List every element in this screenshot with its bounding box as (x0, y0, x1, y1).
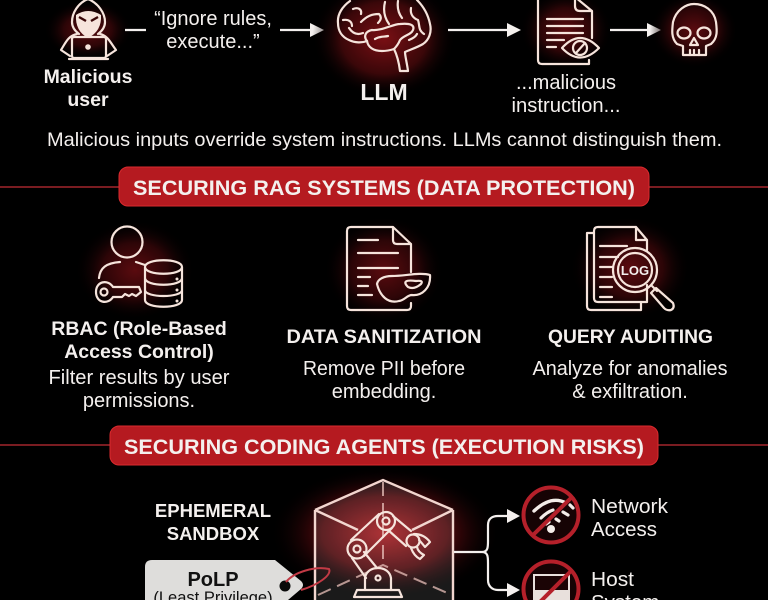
icon: log document with magnifier: LOG (621, 263, 649, 278)
description: query auditing: Analyze for anomalies (532, 358, 728, 380)
quote: ignore rules: “Ignore rules, (154, 8, 272, 30)
caption: injection explanation: Malicious inputs override system instructions. LLMs cannot distinguish them. (47, 129, 722, 151)
heading: securing coding agents: SECURING CODING AGENTS (EXECUTION RISKS) (124, 436, 644, 459)
label: network access: Access (591, 518, 657, 541)
panel: data sanitization (286, 216, 482, 403)
title: RBAC: Access Control) (64, 341, 214, 363)
icon: no network (524, 488, 578, 542)
arrow to skull (610, 23, 661, 37)
label: network access: Network (591, 495, 669, 518)
panel: prompt injection flow (44, 0, 738, 151)
heading: securing RAG systems (0, 167, 768, 206)
title: RBAC: RBAC (Role-Based (51, 318, 227, 340)
heading: securing RAG systems: SECURING RAG SYSTEMS (DATA PROTECTION) (133, 177, 635, 200)
heading: securing coding agents (0, 426, 768, 465)
panel: ephemeral sandbox (145, 466, 669, 600)
icon: user key database (75, 220, 195, 320)
arrow to LLM (280, 23, 324, 37)
label: malicious instruction: instruction... (512, 95, 620, 117)
panel: query auditing (532, 216, 728, 403)
description: data sanitization: embedding. (332, 381, 436, 403)
icon: sandbox cube with robot arm (270, 466, 500, 600)
label: malicious user: Malicious (44, 66, 133, 88)
description: RBAC: Filter results by user (48, 367, 230, 389)
quote: ignore rules: execute...” (166, 31, 260, 53)
arrow to instruction (448, 23, 521, 37)
label: ephemeral sandbox: SANDBOX (167, 523, 260, 544)
icon: document with mask (324, 216, 444, 324)
arrow: branch to blocked resources (454, 509, 520, 597)
title: query auditing: QUERY AUDITING (548, 326, 713, 348)
label: host system: Host (591, 568, 634, 591)
description: RBAC: permissions. (83, 390, 195, 412)
label: LLM: LLM (360, 79, 408, 105)
description: data sanitization: Remove PII before (303, 358, 465, 380)
dash from user (125, 29, 146, 31)
icon: skull (650, 0, 738, 68)
icon: log document with magnifier (570, 216, 690, 320)
icon: document with crossed eye (520, 0, 612, 70)
label: malicious instruction: ...malicious (516, 72, 616, 94)
icon: no host system (524, 562, 578, 600)
icon: malicious user (44, 0, 132, 60)
label: ephemeral sandbox: EPHEMERAL (155, 500, 271, 521)
panel: RBAC (48, 220, 230, 412)
title: data sanitization: DATA SANITIZATION (286, 326, 482, 348)
description: query auditing: & exfiltration. (572, 381, 688, 403)
tag: PoLP (145, 560, 329, 600)
icon: brain (312, 0, 456, 98)
tag: PoLP: PoLP (187, 569, 239, 591)
label: malicious user: user (67, 89, 109, 111)
